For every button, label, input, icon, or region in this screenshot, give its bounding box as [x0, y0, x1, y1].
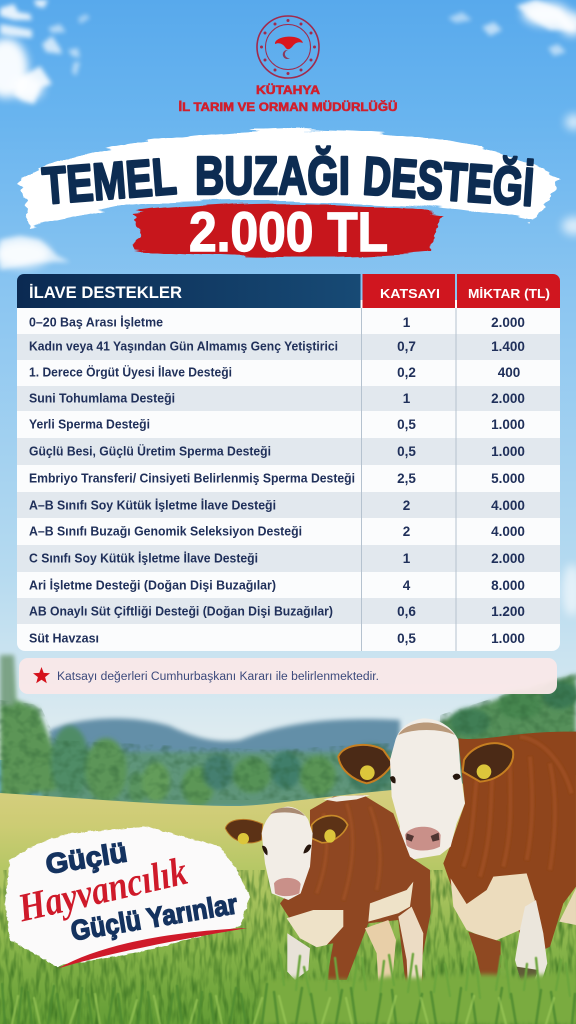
logo crescent	[283, 50, 290, 59]
note text: Katsayı değerleri Cumhurbaşkanı Kararı ile belirlenmektedir.	[57, 671, 379, 683]
row 8: 2	[403, 498, 410, 513]
row 11: Ari İşletme Desteği (Doğan Dişi Buzağılar)	[29, 578, 276, 592]
note background	[19, 658, 557, 694]
column dividers	[362, 308, 456, 651]
row 9	[29, 524, 525, 539]
title banner: white brush stroke	[18, 130, 558, 226]
calf front leg	[287, 933, 310, 980]
cow eyes	[390, 774, 461, 783]
amount: 2.000 TL	[189, 200, 388, 263]
cow body	[443, 732, 576, 957]
row 1	[29, 314, 525, 330]
row 8: 4.000	[491, 498, 525, 513]
calf rear leg	[365, 920, 396, 987]
row 12: 0,6	[397, 604, 416, 619]
row 2	[29, 339, 525, 354]
slogan cursive line: Hayvancılık	[13, 848, 191, 931]
row 10: C Sınıfı Soy Kütük İşletme İlave Desteği	[29, 550, 258, 566]
cow left ear	[338, 745, 393, 783]
illustration: calf	[225, 795, 431, 993]
cow face	[390, 718, 465, 859]
logo: ministry emblem	[257, 16, 319, 78]
row 10	[29, 550, 525, 566]
row 7: 5.000	[491, 471, 525, 486]
logo red wheat canopy	[275, 37, 303, 49]
row 12	[29, 604, 525, 619]
cow front leg	[515, 900, 548, 979]
cow body shading	[463, 737, 572, 877]
calf forelock	[270, 807, 305, 816]
background: distant hills	[48, 672, 576, 756]
row 9: A–B Sınıfı Buzağı Genomik Seleksiyon Desteği	[29, 524, 302, 538]
background: tree band base	[38, 750, 463, 806]
row 7	[29, 471, 525, 486]
calf right ear	[312, 816, 348, 843]
background: tree foliage texture	[0, 670, 576, 800]
title word 1: TEMEL	[40, 148, 179, 216]
cow forelock	[398, 722, 455, 735]
calf face	[262, 807, 313, 900]
background: meadow	[0, 775, 576, 1024]
row 13: 1.000	[491, 631, 525, 646]
row 11	[29, 578, 525, 593]
cow nostrils	[406, 833, 439, 842]
row 3: 1. Derece Örgüt Üyesi İlave Desteği	[29, 364, 232, 380]
row 5: 0,5	[397, 417, 416, 432]
row 4: 2.000	[491, 391, 525, 406]
row 8: A–B Sınıfı Soy Kütük İşletme İlave Desteği	[29, 498, 276, 512]
row 10: 2.000	[491, 551, 525, 566]
table header labels: MİKTAR (TL)	[468, 286, 550, 301]
slogan badge	[5, 827, 250, 968]
table header labels	[29, 284, 550, 302]
foreground: grass blades	[2, 952, 575, 1024]
row 4: Suni Tohumlama Desteği	[29, 392, 175, 406]
calf white belly	[287, 882, 413, 947]
row 6: 1.000	[491, 444, 525, 459]
row 6	[29, 444, 525, 459]
row 4	[29, 391, 525, 406]
calf coat streaks	[317, 803, 380, 900]
table	[17, 274, 560, 651]
slogan line 1: Güçlü	[43, 836, 129, 880]
row 5: Yerli Sperma Desteği	[29, 418, 150, 432]
table header: title cell	[17, 274, 360, 308]
logo inner ring	[266, 24, 310, 70]
logo stars	[260, 19, 316, 75]
background: sky	[0, 0, 576, 760]
row 5: 1.000	[491, 417, 525, 432]
institution line 2: İL TARIM VE ORMAN MÜDÜRLÜĞÜ	[178, 99, 398, 114]
title	[40, 146, 536, 218]
table stripes	[17, 334, 560, 624]
table header labels: KATSAYI	[380, 287, 440, 301]
cow rear leg	[468, 932, 501, 978]
row 7: 2,5	[397, 471, 416, 486]
row 3	[29, 364, 520, 380]
cow muzzle	[405, 827, 441, 850]
row 7: Embriyo Transferi/ Cinsiyeti Belirlenmiş Sperma Desteği	[29, 472, 355, 486]
row 1: 0–20 Baş Arası İşletme	[29, 314, 163, 330]
calf left ear	[225, 819, 263, 843]
cow hoof shade	[517, 967, 538, 987]
icon: red star	[33, 667, 50, 683]
row 1: 1	[403, 315, 411, 330]
row 9: 2	[403, 524, 410, 539]
background: grass texture	[0, 870, 576, 1024]
row 8	[29, 498, 525, 513]
row 4: 1	[403, 391, 411, 406]
row 13: 0,5	[397, 631, 416, 646]
institution name	[178, 82, 398, 114]
row 2: Kadın veya 41 Yaşından Gün Almamış Genç Yetiştirici	[29, 340, 338, 354]
row 13	[29, 631, 525, 646]
ear tags	[360, 764, 491, 780]
calf back highlight	[323, 795, 370, 802]
calf ear tags	[238, 829, 336, 844]
table header labels: İLAVE DESTEKLER	[29, 284, 182, 302]
table header: coefficient cell	[362, 274, 455, 308]
calf far leg	[398, 906, 424, 981]
row 13: Süt Havzası	[29, 632, 99, 646]
cow white flank	[559, 888, 576, 925]
row 2: 0,7	[397, 339, 416, 354]
row 12: 1.200	[491, 604, 525, 619]
row 12: AB Onaylı Süt Çiftliği Desteği (Doğan Dişi Buzağılar)	[29, 604, 333, 618]
row 3: 400	[498, 365, 520, 380]
row 2: 1.400	[491, 339, 525, 354]
cow white belly	[451, 873, 535, 942]
clouds	[0, 0, 576, 616]
row 1: 2.000	[491, 315, 525, 330]
slogan line 3: Güçlü Yarınlar	[69, 888, 240, 947]
amount banner: red brush stroke	[132, 203, 444, 257]
slogan white brush	[5, 827, 250, 967]
cow right ear	[463, 743, 513, 782]
foreground: grass over hooves	[260, 970, 576, 1024]
row 3: 0,2	[397, 365, 416, 380]
row 5	[29, 417, 525, 432]
table body background	[17, 300, 560, 651]
calf muzzle	[274, 878, 301, 896]
row 6: 0,5	[397, 444, 416, 459]
table header: amount cell	[457, 274, 560, 308]
institution line 1: KÜTAHYA	[256, 82, 320, 97]
note box	[19, 658, 557, 694]
calf body	[280, 795, 431, 993]
row 11: 8.000	[491, 578, 525, 593]
logo outer ring	[257, 16, 319, 78]
illustration: big cow	[338, 718, 576, 995]
slogan red swoosh	[58, 928, 247, 968]
row 6: Güçlü Besi, Güçlü Üretim Sperma Desteği	[29, 444, 271, 458]
background: tree line	[0, 655, 576, 806]
row 9: 4.000	[491, 524, 525, 539]
row 10: 1	[403, 551, 411, 566]
calf eyes	[262, 844, 311, 855]
row 11: 4	[403, 578, 411, 593]
title word 2: BUZAĞI	[195, 146, 350, 206]
